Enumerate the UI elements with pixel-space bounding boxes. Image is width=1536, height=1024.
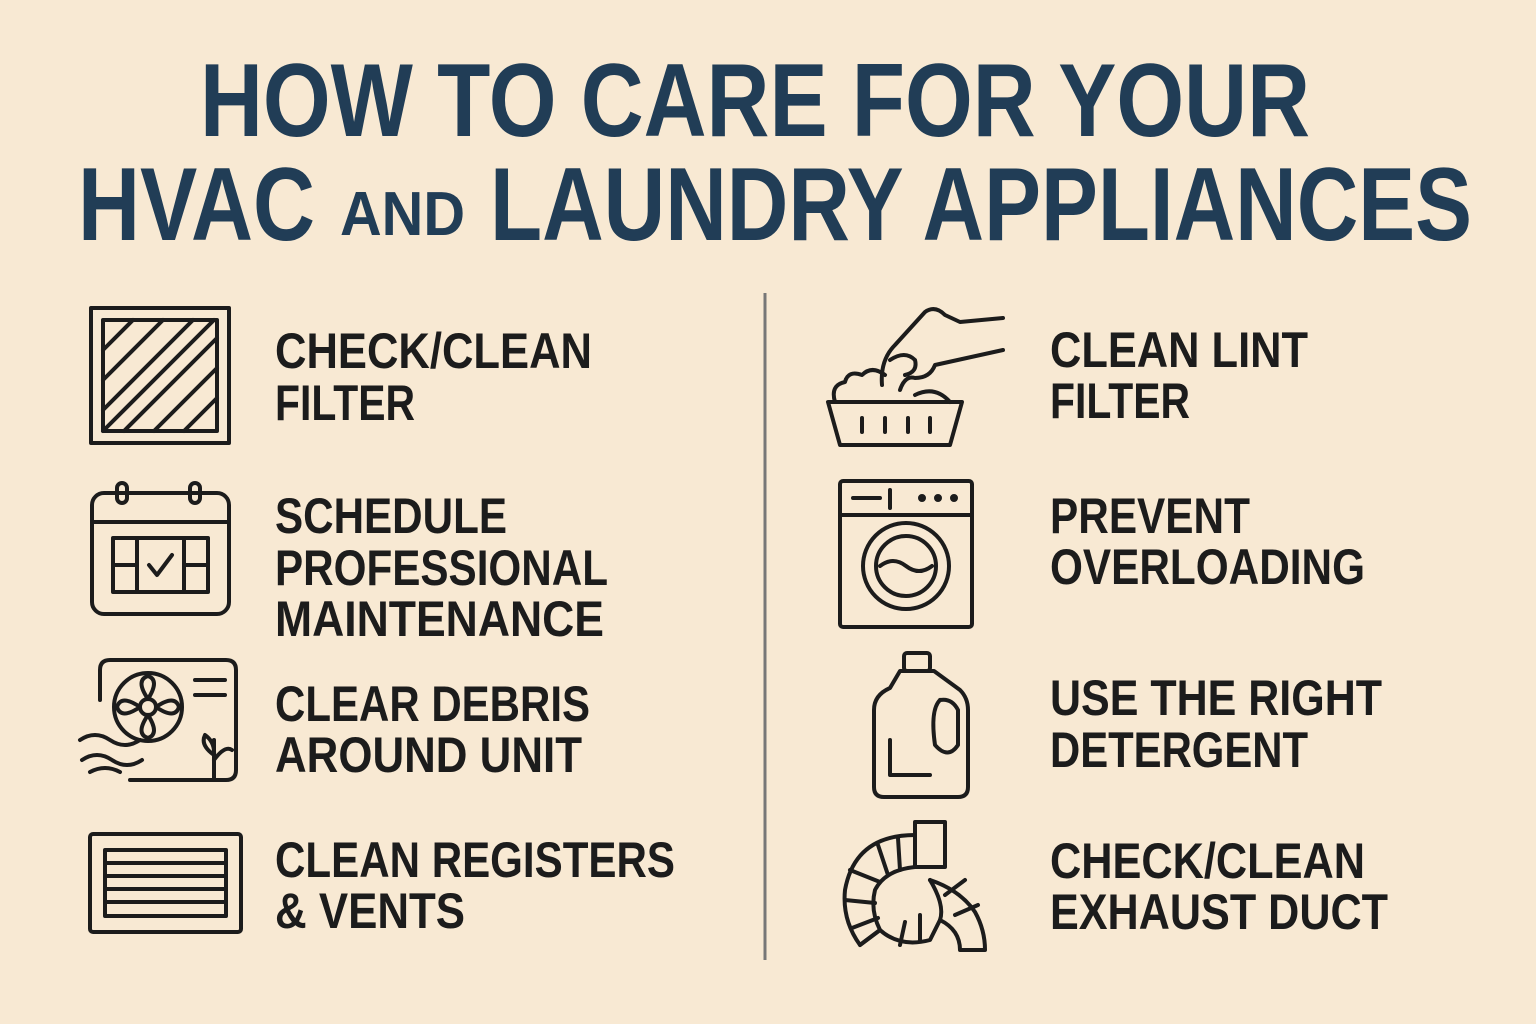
text: clean registers: & VENTS: [275, 883, 465, 939]
icon: detergent: [874, 653, 968, 797]
text: clear debris: CLEAR DEBRIS: [275, 676, 590, 732]
title: [78, 43, 1472, 263]
icon: calendar: [92, 483, 229, 614]
icon: duct: [845, 822, 985, 950]
icon: washer: [840, 481, 972, 627]
text: schedule: PROFESSIONAL: [275, 540, 608, 596]
text: check/clean filter: FILTER: [275, 375, 415, 431]
text: clean lint filter: [1050, 322, 1308, 429]
title: HOW TO CARE FOR YOUR: [200, 43, 1310, 159]
text: clean registers: [275, 832, 675, 939]
icon: ac unit: [80, 660, 236, 780]
text: clean lint filter: CLEAN LINT: [1050, 322, 1308, 378]
text: schedule: [275, 488, 608, 647]
text: clear debris: [275, 676, 590, 783]
text: schedule: SCHEDULE: [275, 488, 507, 544]
text: use the right detergent: DETERGENT: [1050, 722, 1308, 778]
text: check/clean exhaust duct: [1050, 833, 1388, 940]
title: HVAC: [78, 147, 315, 263]
text: prevent overloading: PREVENT: [1050, 488, 1250, 544]
text: clean lint filter: FILTER: [1050, 373, 1190, 429]
text: check/clean filter: [275, 323, 592, 431]
text: clear debris: AROUND UNIT: [275, 727, 582, 783]
text: schedule: MAINTENANCE: [275, 591, 604, 647]
text: clean registers: CLEAN REGISTERS: [275, 832, 675, 888]
icon: register: [90, 834, 241, 932]
text: use the right detergent: [1050, 670, 1382, 778]
text: prevent overloading: [1050, 488, 1365, 595]
icon: lint filter: [828, 309, 1003, 445]
icon: filter: [91, 308, 229, 443]
text: use the right detergent: USE THE RIGHT: [1050, 670, 1382, 726]
text: check/clean filter: CHECK/CLEAN: [275, 323, 592, 379]
text: check/clean exhaust duct: CHECK/CLEAN: [1050, 833, 1365, 889]
text: prevent overloading: OVERLOADING: [1050, 539, 1365, 595]
title: AND: [340, 180, 465, 249]
text: check/clean exhaust duct: EXHAUST DUCT: [1050, 884, 1388, 940]
